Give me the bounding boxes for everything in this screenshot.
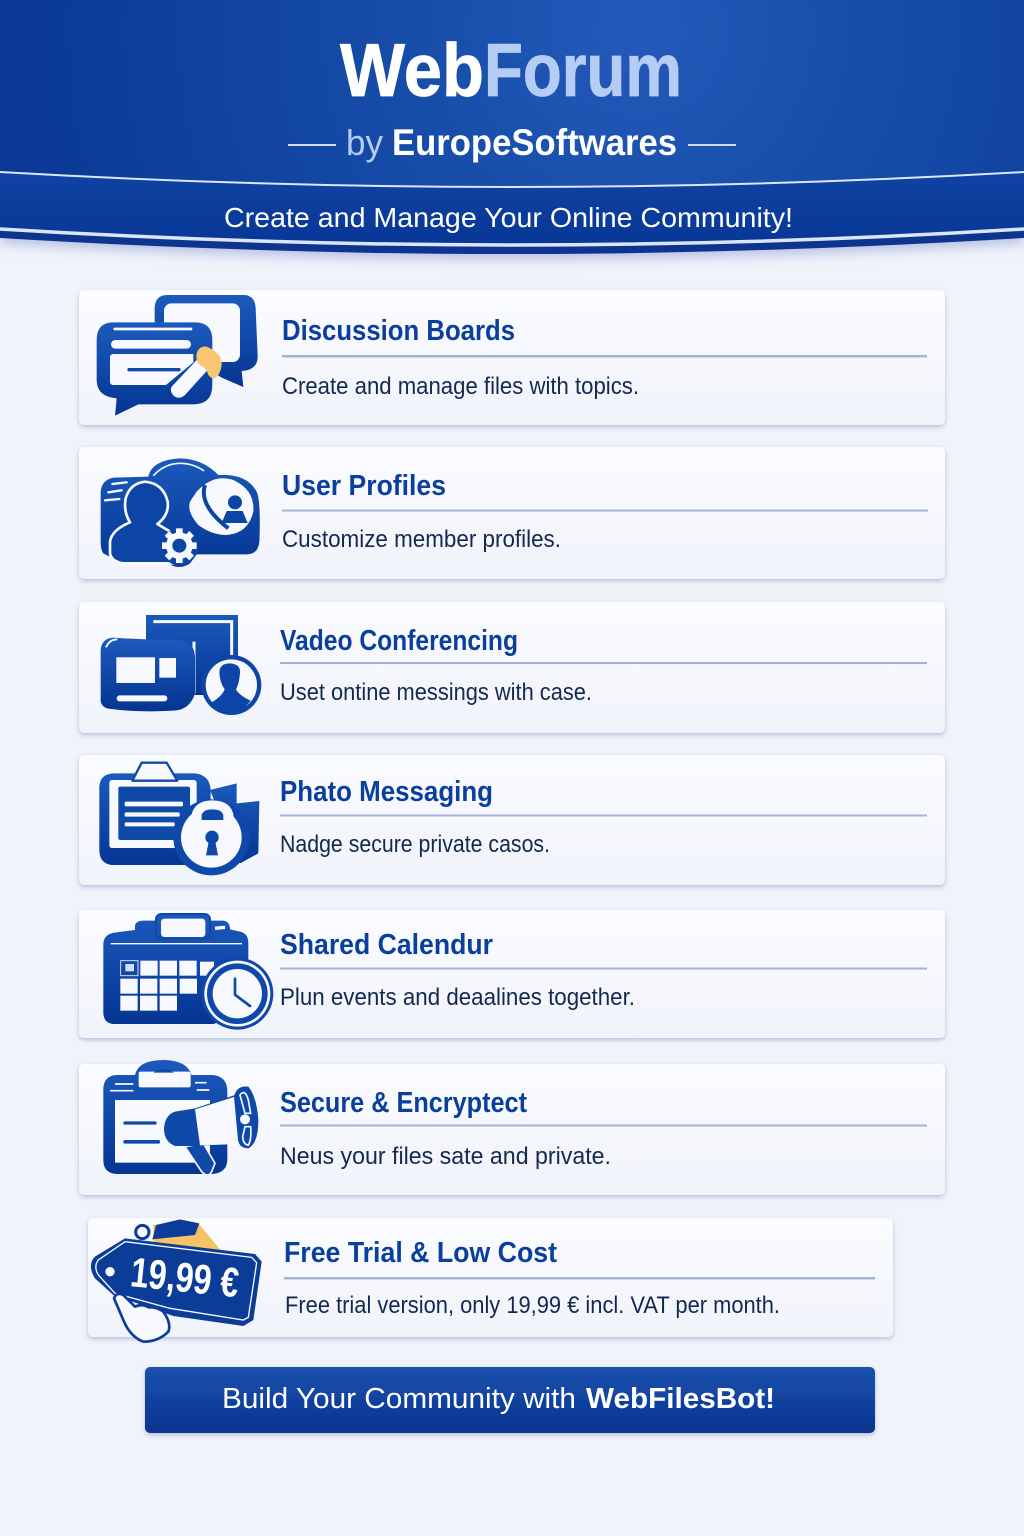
button text	[222, 1383, 775, 1415]
icon: clipboard with megaphone	[103, 1060, 258, 1175]
panel: user profiles	[79, 447, 945, 579]
button text: Build Your Community with	[222, 1383, 576, 1415]
panel: free trial and low cost	[88, 1218, 893, 1342]
subtitle: by	[346, 122, 383, 163]
icon: video window with user	[101, 615, 261, 715]
heading: Phato Messaging	[280, 776, 493, 808]
tagline: Create and Manage Your Online Community!	[224, 202, 793, 233]
panel: discussion boards	[79, 290, 945, 425]
heading: Secure & Encryptect	[280, 1087, 527, 1119]
subtitle: EuropeSoftwares	[392, 122, 677, 163]
title: Forum	[484, 28, 682, 112]
panel: secure and encrypted	[79, 1060, 945, 1195]
price: 19,99 €	[128, 1248, 241, 1306]
icon: calendar with clock	[103, 913, 273, 1030]
heading: Vadeo Conferencing	[280, 625, 518, 657]
description: Create and manage files with topics.	[282, 373, 639, 400]
panel: photo messaging	[79, 755, 945, 885]
description: Free trial version, only 19,99 € incl. VAT per month.	[285, 1292, 780, 1319]
icon: price tag with hand	[91, 1219, 262, 1342]
button text: WebFilesBot!	[586, 1383, 775, 1415]
call to action button	[145, 1367, 875, 1433]
icon: user profile with gear	[101, 458, 260, 567]
panel: video conferencing	[79, 602, 945, 733]
heading: Free Trial & Low Cost	[284, 1237, 557, 1269]
icon: chat bubbles with pencil	[97, 295, 258, 416]
heading: Discussion Boards	[282, 315, 515, 347]
heading: Shared Calendur	[280, 929, 493, 961]
description: Neus your files sate and private.	[280, 1143, 611, 1170]
description: Customize member profiles.	[282, 526, 561, 553]
panel: shared calendar	[79, 910, 945, 1038]
heading: User Profiles	[282, 470, 446, 502]
header banner	[0, 0, 1024, 254]
description: Nadge secure private casos.	[280, 831, 550, 858]
icon: clipboard with padlock	[99, 763, 259, 875]
description: Plun events and deaalines together.	[280, 984, 635, 1011]
description: Uset ontine messings with case.	[280, 679, 592, 706]
title	[340, 28, 682, 112]
title: Web	[340, 28, 484, 112]
subtitle	[288, 122, 736, 163]
